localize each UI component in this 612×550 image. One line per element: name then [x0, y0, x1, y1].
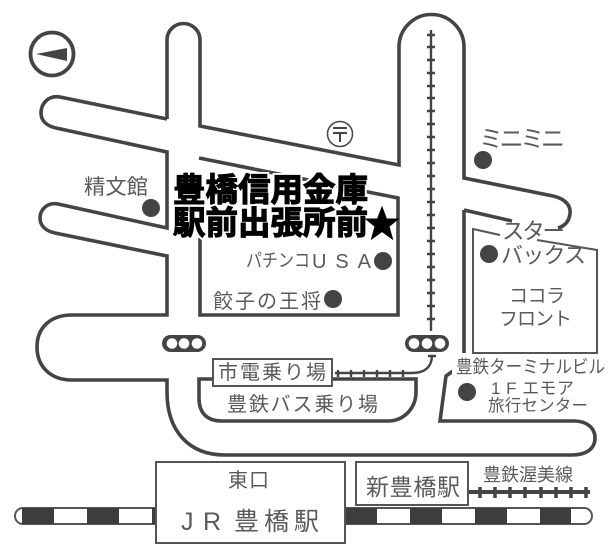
- label: Cocola Front: フロント: [499, 309, 572, 330]
- Toyotetsu Atsumi line: [468, 465, 590, 498]
- label: Mini Mini: ミニミニ: [479, 126, 565, 153]
- label: Pachinko USA: パチンコ: [246, 250, 310, 271]
- railway: Toyotetsu city tram: [335, 30, 436, 377]
- label: Pachinko USA: USA: [312, 251, 372, 273]
- title: Toyohashi Shinkin Bank Ekimae Branch: 駅前出張所前: [173, 205, 368, 241]
- label: Toyotetsu Terminal Building: [452, 356, 607, 415]
- label: Gyoza no Osho: 餃子の王将: [213, 290, 321, 313]
- label: Mini Mini: [474, 126, 565, 169]
- JR main line: [15, 508, 592, 524]
- tram stop box: 市電乗り場: [218, 361, 326, 384]
- label: Pachinko USA: [246, 250, 392, 273]
- traffic signal left: [162, 335, 206, 352]
- title: Toyohashi Shinkin Bank Ekimae Branch: 駅前出張所前: [173, 205, 368, 241]
- title: Toyohashi Shinkin Bank Ekimae Branch: 豊橋信用金庫: [173, 172, 368, 208]
- icon: star marker: [366, 207, 398, 239]
- label: Toyotetsu Terminal Building: 1 F エモア: [491, 379, 574, 398]
- label: Starbucks: [480, 219, 586, 268]
- Toyotetsu Atsumi line: 豊鉄渥美線: [483, 465, 573, 485]
- label: Starbucks: スター: [502, 219, 565, 244]
- label: Toyotetsu bus stop: 豊鉄バス乗り場: [227, 393, 378, 416]
- JR Toyohashi Station box: JR豊橋駅: [181, 508, 319, 536]
- Shin-Toyohashi Station box: [356, 462, 468, 505]
- icon: post office mark: [328, 122, 352, 146]
- JR Toyohashi Station box: [156, 462, 345, 543]
- JR Toyohashi Station box: 東口: [228, 469, 269, 492]
- title: Toyohashi Shinkin Bank Ekimae Branch: [173, 172, 368, 241]
- road network: [37, 15, 595, 455]
- building: Cocola Front: [473, 229, 597, 353]
- icon: north compass: [30, 32, 74, 76]
- label: Seibunkan: 精文館: [84, 176, 148, 199]
- label: Cocola Front: ココラ: [509, 286, 565, 307]
- title: Toyohashi Shinkin Bank Ekimae Branch: 豊橋信用金庫: [173, 172, 368, 208]
- Shin-Toyohashi Station box: 新豊橋駅: [366, 474, 460, 500]
- label: Toyotetsu Terminal Building: 旅行センター: [488, 396, 588, 415]
- label: Starbucks: バックス: [501, 243, 586, 268]
- traffic signal right: [405, 335, 449, 352]
- label: Seibunkan: [84, 176, 160, 217]
- label: Cocola Front: [499, 286, 572, 330]
